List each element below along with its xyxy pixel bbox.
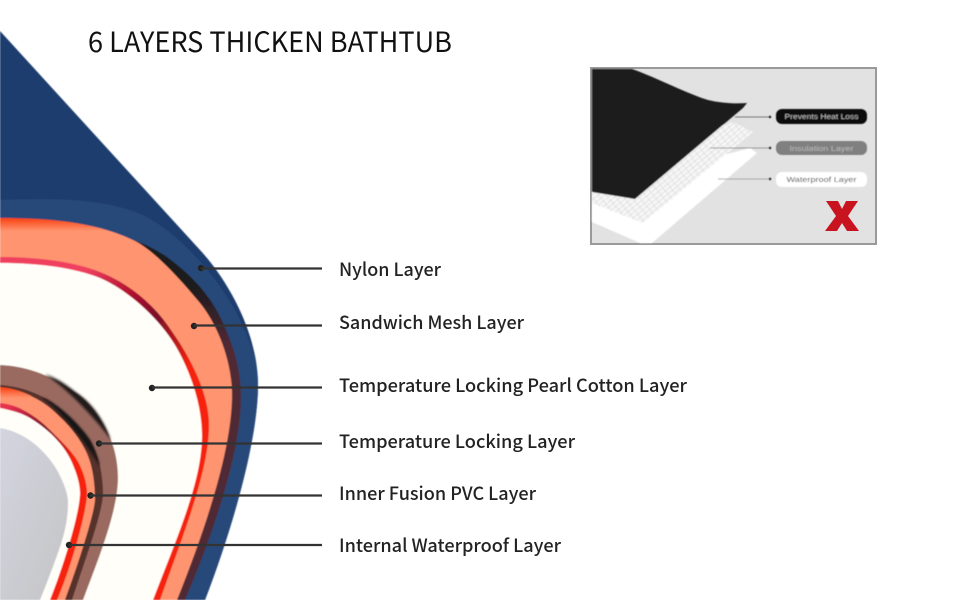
sheet: black heat layer (592, 69, 747, 199)
pill: insulation layer (769, 141, 867, 155)
layer: dark band (0, 225, 241, 600)
callout: sandwich mesh layer (191, 309, 525, 335)
callout: inner fusion pvc layer (87, 480, 537, 506)
pill: waterproof layer: Waterproof Layer (786, 177, 857, 184)
shade: black crescent on inner band (42, 397, 100, 466)
pointer: waterproof layer (718, 178, 770, 180)
pointer: insulation layer (710, 147, 770, 149)
layer: red edge (0, 257, 209, 600)
inset illustration: stacked sheets (592, 69, 867, 243)
callout: nylon layer (198, 256, 442, 282)
callout: internal waterproof layer: Internal Waterproof Layer (339, 532, 562, 558)
layer: inner brown band (0, 365, 118, 600)
pill: waterproof layer (769, 172, 867, 187)
layer: pearl cotton cream (0, 263, 202, 600)
pill: prevents heat loss (769, 109, 867, 124)
pointer: heat layer (735, 116, 770, 118)
layer: inner red (0, 403, 87, 600)
sheet: mesh insulation (592, 122, 753, 223)
callout: sandwich mesh layer: Sandwich Mesh Layer (339, 309, 525, 335)
shade: black crescent on brown band (45, 374, 111, 440)
cross-section diagram of bathtub layers (0, 31, 258, 600)
layer: inner salmon (0, 387, 95, 600)
layer: lighter navy ridge (0, 199, 258, 600)
callout: inner fusion pvc layer: Inner Fusion PVC Layer (339, 480, 537, 506)
title: 6 LAYERS THICKEN BATHTUB (88, 21, 452, 61)
pill: prevents heat loss: Prevents Heat Loss (784, 114, 859, 121)
inset background (591, 68, 876, 244)
layer: grey interior (0, 428, 68, 600)
callout: temperature locking pearl cotton layer: Temperature Locking Pearl Cotton Layer (339, 372, 688, 398)
callout: temperature locking layer (96, 428, 576, 454)
layer: inner cream (0, 408, 80, 600)
layer: inner dark band (0, 385, 103, 600)
layer: navy nylon outer (0, 31, 258, 600)
pill: insulation layer: Insulation Layer (790, 146, 854, 153)
callout: temperature locking layer: Temperature Locking Layer (339, 428, 576, 454)
icon: red x mark (825, 201, 859, 231)
panel: competitor three-layer inset (591, 68, 876, 244)
callout: internal waterproof layer (66, 532, 562, 558)
callout: nylon layer: Nylon Layer (339, 256, 442, 282)
layer: salmon sandwich mesh (0, 218, 232, 600)
callout: temperature locking pearl cotton layer (149, 372, 688, 398)
sheet: white waterproof (592, 148, 757, 243)
